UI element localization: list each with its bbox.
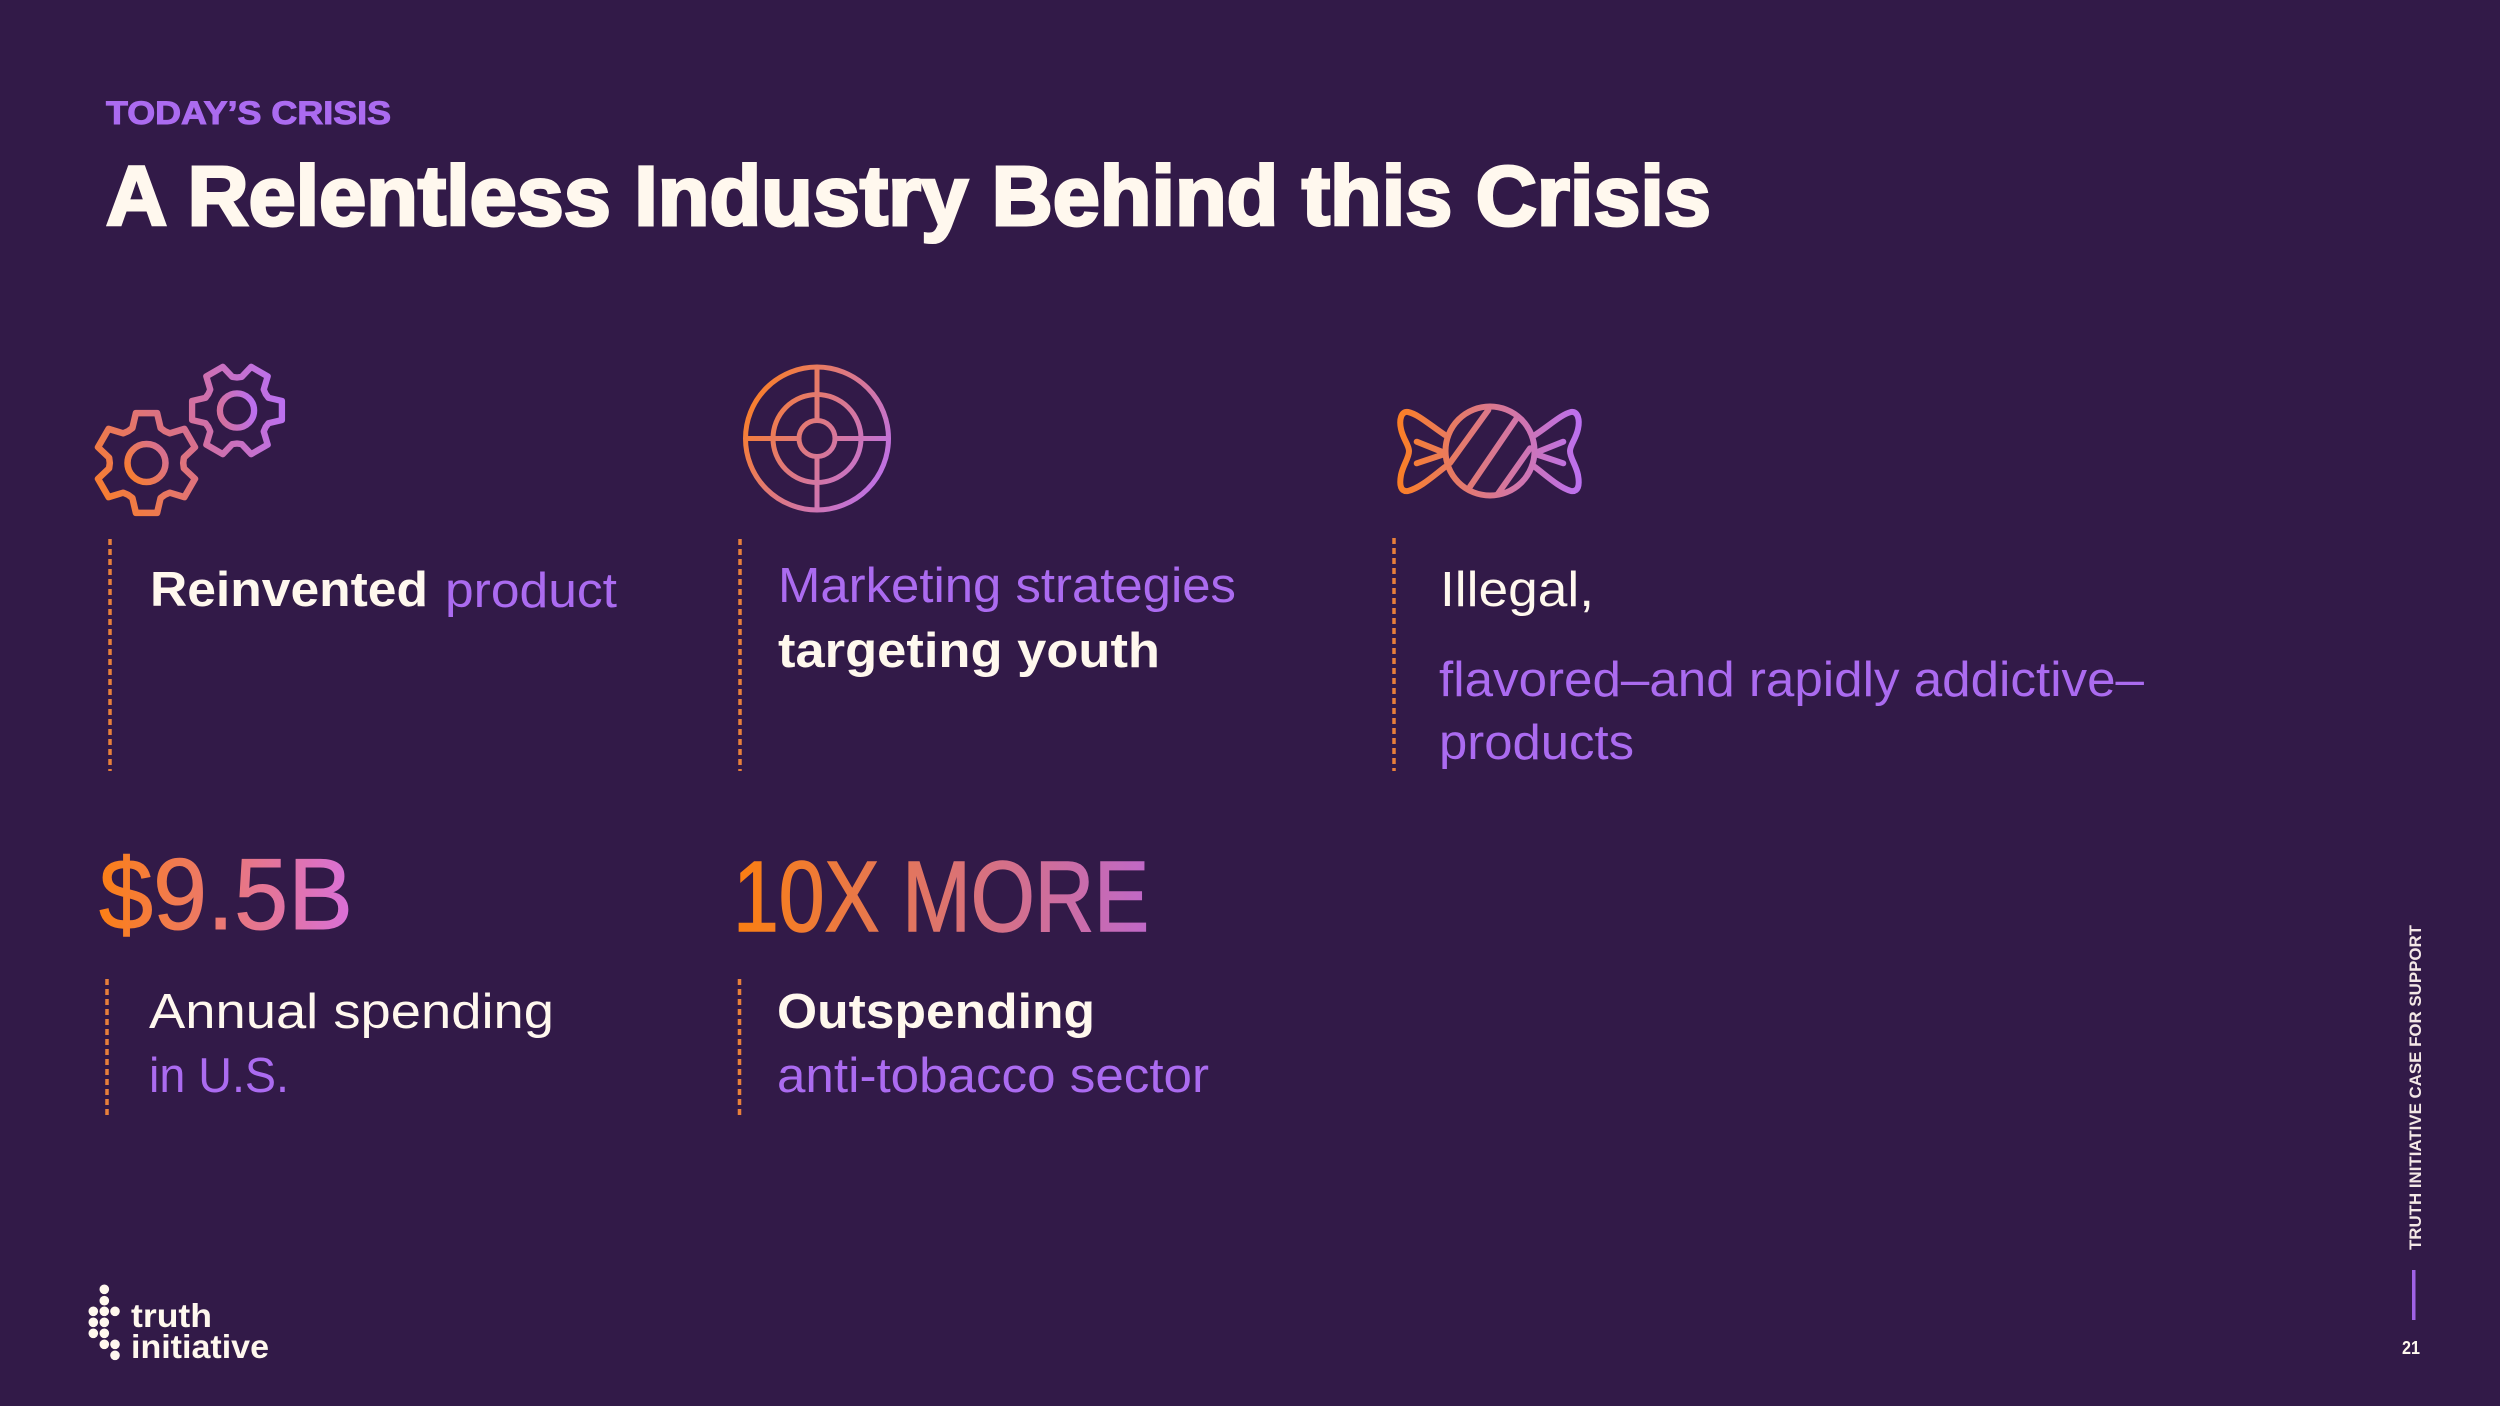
column 1 text: reinvented product: Reinvented (150, 563, 428, 617)
column 3 text: illegal flavored products: Illegal, (1440, 563, 1594, 617)
annual spending text: in U.S. (149, 1049, 289, 1103)
eyebrow label: TODAY’S CRISIS (106, 95, 391, 131)
column 2 text: marketing strategies targeting youth: targeting youth (778, 624, 1160, 678)
logo: truth initiative (88, 1284, 269, 1365)
column 1 text: reinvented product (110, 539, 617, 771)
sidebar rule (2412, 1270, 2416, 1320)
logo: truth initiative: initiative (131, 1328, 269, 1365)
annual spending text (107, 979, 554, 1116)
outspending text: Outspending (777, 985, 1095, 1039)
statistic: $9.5B: $9.5B (99, 839, 353, 951)
column 3 text: illegal flavored products: products (1439, 716, 1634, 770)
annual spending text: Annual spending (149, 985, 554, 1039)
page number: 21 (2402, 1338, 2420, 1358)
icon: small gear (192, 367, 282, 454)
column 1 text: reinvented product: product (445, 564, 617, 618)
icon: candy (1400, 406, 1579, 496)
icon: target (746, 367, 888, 510)
sidebar label: TRUTH INITIATIVE CASE FOR SUPPORT (2407, 925, 2425, 1250)
column 2 text: marketing strategies targeting youth (740, 539, 1236, 771)
column 3 text: illegal flavored products: flavored–and rapidly addictive– (1439, 653, 2145, 707)
icon: large gear (98, 413, 195, 513)
column 2 text: marketing strategies targeting youth: Marketing strategies (778, 559, 1236, 613)
outspending text: anti-tobacco sector (777, 1049, 1209, 1103)
statistic: 10X MORE: 10X MORE (733, 841, 1149, 953)
icon: gears (98, 367, 282, 513)
column 3 text: illegal flavored products (1394, 538, 2145, 771)
title: A Relentless Industry Behind this Crisis (106, 149, 1711, 243)
outspending text (740, 979, 1209, 1116)
logo: truth initiative: truth (131, 1297, 212, 1334)
